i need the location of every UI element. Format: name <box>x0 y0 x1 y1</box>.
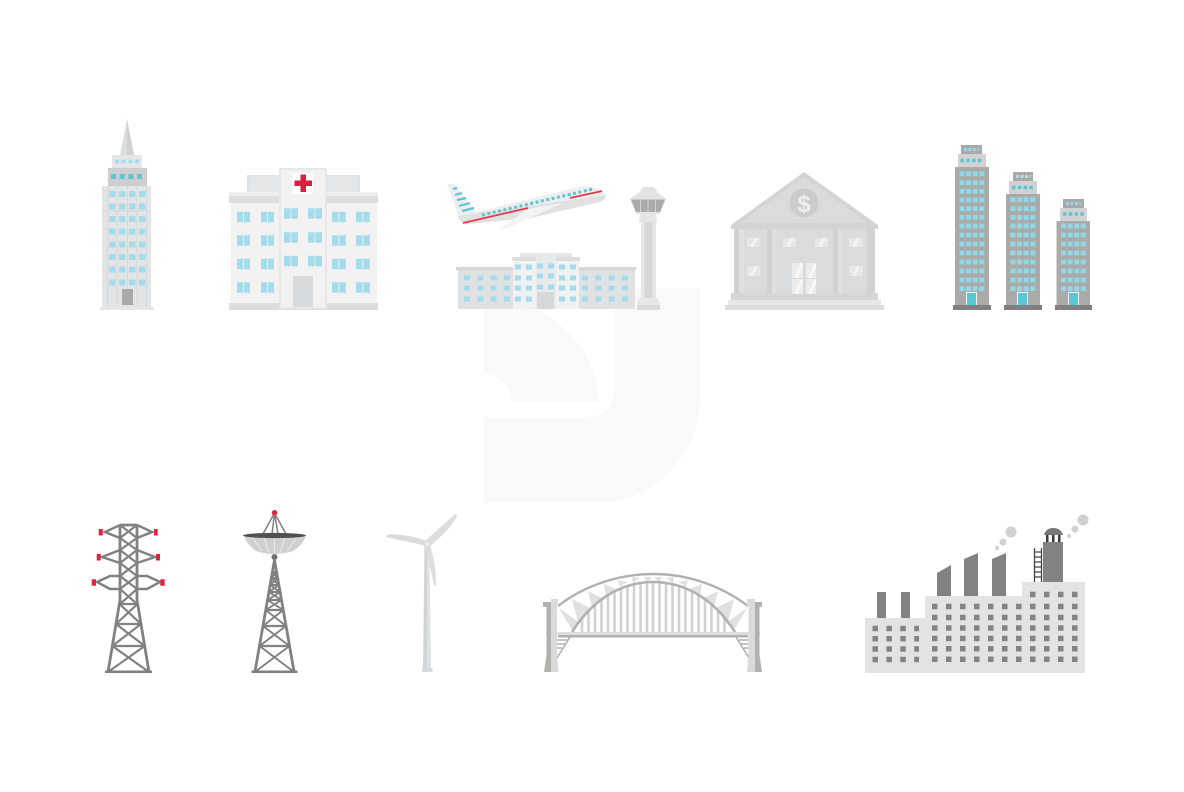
bracing <box>557 637 749 658</box>
icon: three office towers <box>953 145 1092 310</box>
red cross sign <box>292 173 313 194</box>
hangers <box>582 580 724 634</box>
arches <box>558 574 748 606</box>
control tower <box>630 187 666 310</box>
terminal building <box>456 253 636 309</box>
watermark logo <box>484 288 700 503</box>
infographic canvas <box>92 120 1092 673</box>
dollar sign: $ <box>797 191 811 218</box>
icon: airport with plane and control tower <box>447 184 666 310</box>
icon: electricity pylon <box>92 525 165 673</box>
middle tower <box>1004 172 1042 310</box>
tall tower <box>953 145 991 310</box>
icon: hospital <box>229 168 378 310</box>
airplane <box>447 184 606 229</box>
red insulators <box>92 529 165 586</box>
deck <box>546 632 760 635</box>
chimneys <box>877 542 1063 618</box>
icon: bank building <box>725 172 884 310</box>
icon: wind turbine <box>386 514 457 672</box>
short tower <box>1055 199 1092 310</box>
right pylon <box>747 599 762 672</box>
icon: factory <box>865 514 1088 673</box>
icon: arch bridge <box>543 574 762 672</box>
smoke puffs <box>995 514 1088 550</box>
factory body <box>865 582 1085 673</box>
icon: radio dish tower <box>243 510 306 673</box>
truss triangles <box>559 577 747 630</box>
icon: skyscraper with spire <box>100 119 154 310</box>
factory windows <box>872 628 919 660</box>
left pylon <box>543 599 558 672</box>
dome and ladder <box>1044 528 1063 535</box>
